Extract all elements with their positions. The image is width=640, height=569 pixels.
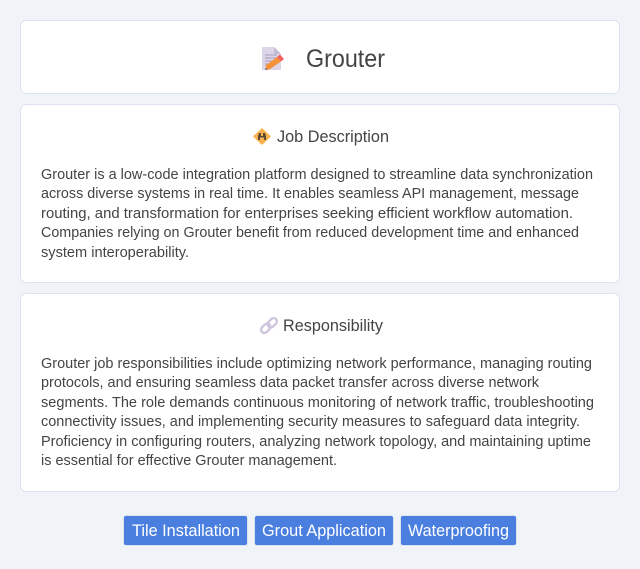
panel: title [20,20,620,94]
responsibility text [41,356,594,469]
icon: document with pencil [262,47,284,70]
tag: tile installation: Tile Installation [132,522,240,540]
responsibility text: is essential for effective Grouter management. [41,453,337,469]
tag: tile installation [124,516,248,546]
title text: Grouter [306,45,385,73]
tag: grout application [254,516,394,546]
panel: responsibility [20,294,620,492]
heading: responsibility: Responsibility [283,317,384,335]
responsibility text: Proficiency in configuring routers, analyzing network topology, and maintaining uptime [41,434,591,450]
panel: job description [20,104,620,282]
job description text: routing, and transformation for enterprises seeking efficient workflow automation. [41,206,573,222]
responsibility text: segments. The role demands continuous monitoring of network traffic, troubleshooting [41,395,594,411]
job description text: system interoperability. [41,245,189,261]
job description text: Grouter is a low-code integration platform designed to streamline data synchronization [41,167,593,183]
tag: waterproofing [400,516,516,546]
icon: diamond road sign [254,129,270,144]
job description text [41,167,593,261]
responsibility text: Grouter job responsibilities include optimizing network performance, managing routing [41,356,592,372]
responsibility text: protocols, and ensuring seamless data packet transfer across diverse network [41,375,540,391]
job description text: across diverse systems in real time. It enables seamless API management, message [41,186,579,202]
icon: chain link [260,317,278,334]
responsibility text: connectivity issues, and implementing security measures to safeguard data integrity. [41,414,580,430]
heading: job description: Job Description [277,128,389,146]
tag: waterproofing: Waterproofing [408,522,509,540]
tag: grout application: Grout Application [262,522,386,540]
job description text: Companies relying on Grouter benefit from reduced development time and enhanced [41,225,579,241]
